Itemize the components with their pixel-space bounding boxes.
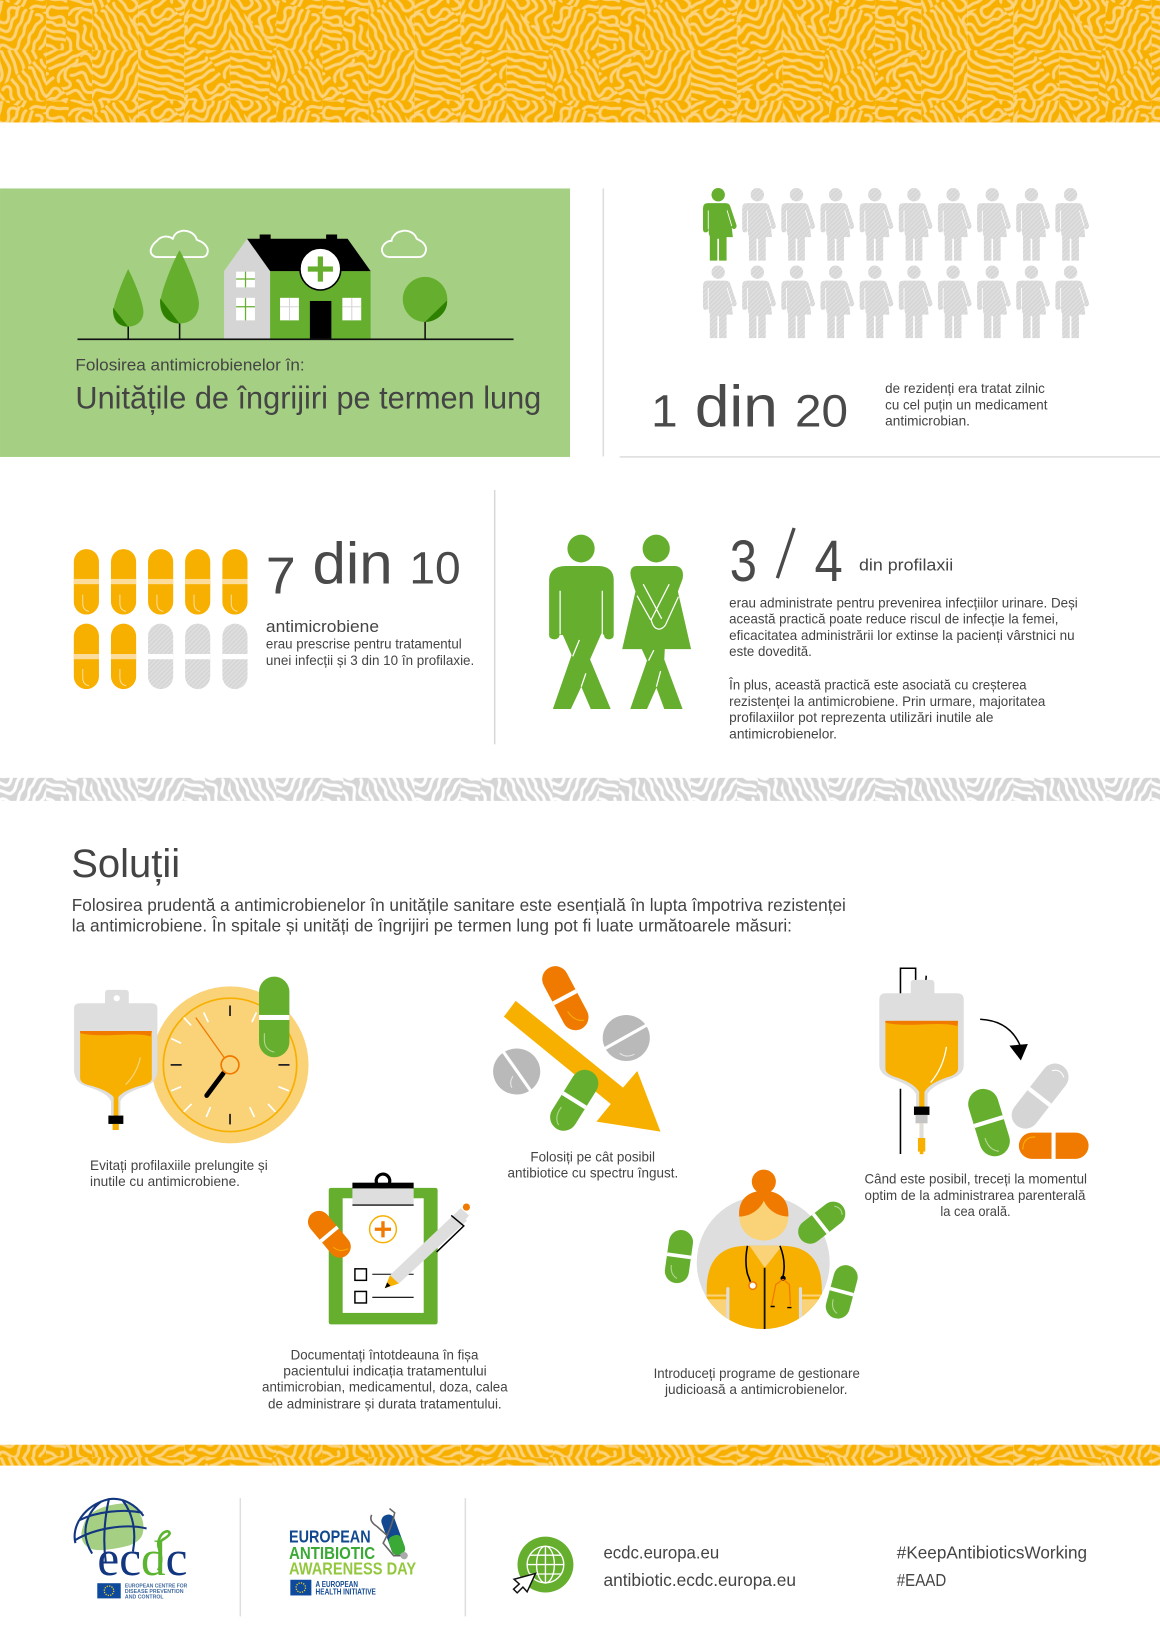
solution 4 caption: Documentați întotdeauna în fișa	[291, 1347, 479, 1362]
solution 4 caption: de administrare și durata tratamentului.	[268, 1396, 502, 1411]
icon: doctor	[696, 1170, 830, 1330]
stat description	[266, 617, 474, 668]
solution 4 caption	[262, 1347, 508, 1411]
logo: European Antibiotic Awareness Day	[289, 1509, 416, 1597]
solutions intro	[72, 895, 846, 936]
icon: green capsule	[964, 1085, 1014, 1160]
solution 2 caption: antibiotice cu spectru îngust.	[508, 1166, 678, 1181]
icon: tree tall	[160, 250, 199, 339]
solution 5: doctor	[664, 1170, 858, 1330]
stat description: cu cel puțin un medicament	[885, 397, 1048, 412]
pictogram: 1 in 20 residents	[703, 188, 1089, 338]
logo wordmark: ANTIBIOTIC	[289, 1543, 375, 1563]
solution 5 caption: judicioasă a antimicrobienelor.	[664, 1382, 847, 1397]
arrow: curved down	[980, 1019, 1028, 1060]
tagline: HEALTH INITIATIVE	[316, 1588, 376, 1597]
solution 3 caption: optim de la administrarea parenterală	[865, 1188, 1086, 1203]
icon: grey tablet right	[603, 1015, 650, 1061]
solution 3 caption: la cea orală.	[940, 1204, 1011, 1219]
solution 1: IV bag and clock	[74, 977, 309, 1143]
icon: capsule with stethoscope	[371, 1509, 408, 1559]
title kicker: Folosirea antimicrobienelor în:	[75, 356, 305, 375]
stat description: unei infecții și 3 din 10 în profilaxie.	[266, 653, 474, 668]
solution 4 caption: antimicrobian, medicamentul, doza, calea	[262, 1380, 508, 1395]
ECDC full name	[125, 1584, 187, 1601]
logo wordmark: EUROPEAN	[289, 1527, 371, 1547]
icon: EU flag	[290, 1580, 311, 1595]
solution 3: IV to oral switch	[879, 968, 1089, 1160]
stat description	[885, 381, 1048, 429]
websites	[603, 1543, 796, 1590]
grey pattern divider	[0, 778, 1160, 801]
icon: woman	[622, 535, 691, 709]
stat: 7 din 10: din	[296, 531, 409, 596]
prophylaxis explanation text: eficacitatea administrării lor extinse la pacienți vârstnici nu	[729, 628, 1075, 643]
illustration: care home with trees	[77, 231, 514, 340]
hashtags: #KeepAntibioticsWorking	[897, 1543, 1087, 1563]
icon: arrow down	[504, 1001, 661, 1132]
bottom pattern band	[0, 1445, 1160, 1466]
prophylaxis explanation text: erau administrate pentru prevenirea infecțiilor urinare. Deși	[729, 596, 1078, 611]
solution 1 caption: Evitați profilaxiile prelungite și	[90, 1158, 268, 1173]
solutions intro: la antimicrobiene. În spitale și unități de îngrijiri pe termen lung pot fi luate următoarele măsuri:	[72, 916, 792, 936]
websites: antibiotic.ecdc.europa.eu	[603, 1570, 796, 1590]
icon: green capsule top right	[793, 1197, 850, 1249]
solution 1 caption: inutile cu antimicrobiene.	[90, 1174, 240, 1189]
stat: 3 / 4: 3	[730, 529, 757, 594]
icon: clock	[152, 986, 309, 1143]
icon: tree small	[113, 269, 143, 339]
stat: 7 din 10: 10	[409, 542, 461, 593]
ECDC full name: AND CONTROL	[125, 1595, 164, 1601]
icon: tree round	[403, 277, 447, 339]
icon: green capsule	[545, 1065, 604, 1136]
icon: cloud left	[151, 231, 208, 257]
icon: EU flag	[97, 1583, 121, 1598]
solution 2 caption: Folosiți pe cât posibil	[530, 1150, 655, 1165]
solution 2 caption	[508, 1150, 678, 1181]
icon: grey capsule	[1006, 1058, 1074, 1134]
solution 4 caption: pacientului indicația tratamentului	[283, 1363, 487, 1378]
solution 4: clipboard	[303, 1174, 470, 1324]
prophylaxis explanation text: este dovedită.	[729, 644, 812, 659]
icon: orange capsule	[538, 962, 593, 1035]
icon: IV bag	[879, 980, 964, 1154]
logo wordmark	[289, 1527, 416, 1579]
solution 3 caption: Când este posibil, treceți la momentul	[865, 1171, 1087, 1186]
stat description: antimicrobian.	[885, 414, 970, 429]
icon: clipboard	[329, 1174, 438, 1324]
tagline: A EUROPEAN	[316, 1580, 358, 1589]
hashtags: #EAAD	[897, 1570, 946, 1590]
icon: globe	[75, 1499, 147, 1562]
logo: ECDC	[75, 1499, 187, 1601]
websites: ecdc.europa.eu	[603, 1543, 719, 1563]
stat description: de rezidenți era tratat zilnic	[885, 381, 1045, 396]
stat: 1 din 20: 1 din 20	[651, 375, 848, 440]
logo wordmark: AWARENESS DAY	[289, 1559, 416, 1579]
icon: house	[224, 235, 371, 339]
prophylaxis explanation text: În plus, această practică este asociată cu creșterea	[728, 677, 1027, 692]
prophylaxis explanation text	[728, 596, 1078, 742]
panel: title	[0, 188, 570, 457]
icon: web globe with cursor	[514, 1537, 573, 1593]
stat: 7 din 10: 7	[266, 547, 296, 605]
solution 3 caption	[865, 1171, 1087, 1219]
ECDC full name: EUROPEAN CENTRE FOR	[125, 1584, 187, 1590]
icon: man	[549, 535, 614, 709]
heading: solutions: Soluții	[71, 842, 180, 886]
tagline	[316, 1580, 376, 1597]
solutions intro: Folosirea prudentă a antimicrobienelor în unitățile sanitare este esențială în lupta împotriva rezistenței	[72, 895, 846, 915]
stat label: din profilaxii	[859, 556, 953, 575]
solution 5 caption	[654, 1366, 860, 1397]
icon: orange capsule	[1019, 1133, 1089, 1159]
stat: 3 / 4	[730, 527, 843, 594]
prophylaxis explanation text: profilaxiilor pot reprezenta utilizări inutile ale	[729, 710, 994, 725]
icon: orange capsule	[303, 1206, 355, 1262]
prophylaxis explanation text: antimicrobienelor.	[729, 727, 837, 742]
top pattern band	[0, 0, 1160, 122]
wordmark: ecdc: ecdc	[97, 1530, 187, 1586]
ECDC full name: DISEASE PREVENTION	[125, 1589, 184, 1595]
icon: IV stand	[900, 968, 926, 1154]
solution 5 caption: Introduceți programe de gestionare	[654, 1366, 860, 1381]
stat: 3 / 4: 4	[815, 529, 843, 594]
stat description: erau prescrise pentru tratamentul	[266, 637, 462, 652]
solution 1 caption	[90, 1158, 268, 1189]
icon: cloud right	[382, 231, 426, 257]
icon: d stem	[158, 1531, 170, 1570]
icon: grey tablet left	[493, 1048, 540, 1095]
hashtags	[897, 1543, 1087, 1590]
icon: pen	[385, 1204, 470, 1288]
icon: green capsule bottom right	[823, 1262, 860, 1321]
stat description: antimicrobiene	[266, 617, 379, 636]
icon: green capsule left	[663, 1228, 695, 1285]
solution 2: narrow spectrum arrow and pills	[493, 962, 661, 1136]
prophylaxis explanation text: această practică poate reduce riscul de infecție la femei,	[729, 612, 1058, 627]
icon: IV bag	[74, 990, 157, 1130]
title: Unitățile de îngrijiri pe termen lung	[75, 380, 541, 415]
prophylaxis explanation text: rezistenței la antimicrobiene. Prin urmare, majoritatea	[729, 694, 1046, 709]
icon: green capsule	[259, 977, 289, 1057]
pictogram: 7 in 10 capsules	[74, 549, 248, 689]
pictogram: man and woman	[549, 535, 691, 709]
